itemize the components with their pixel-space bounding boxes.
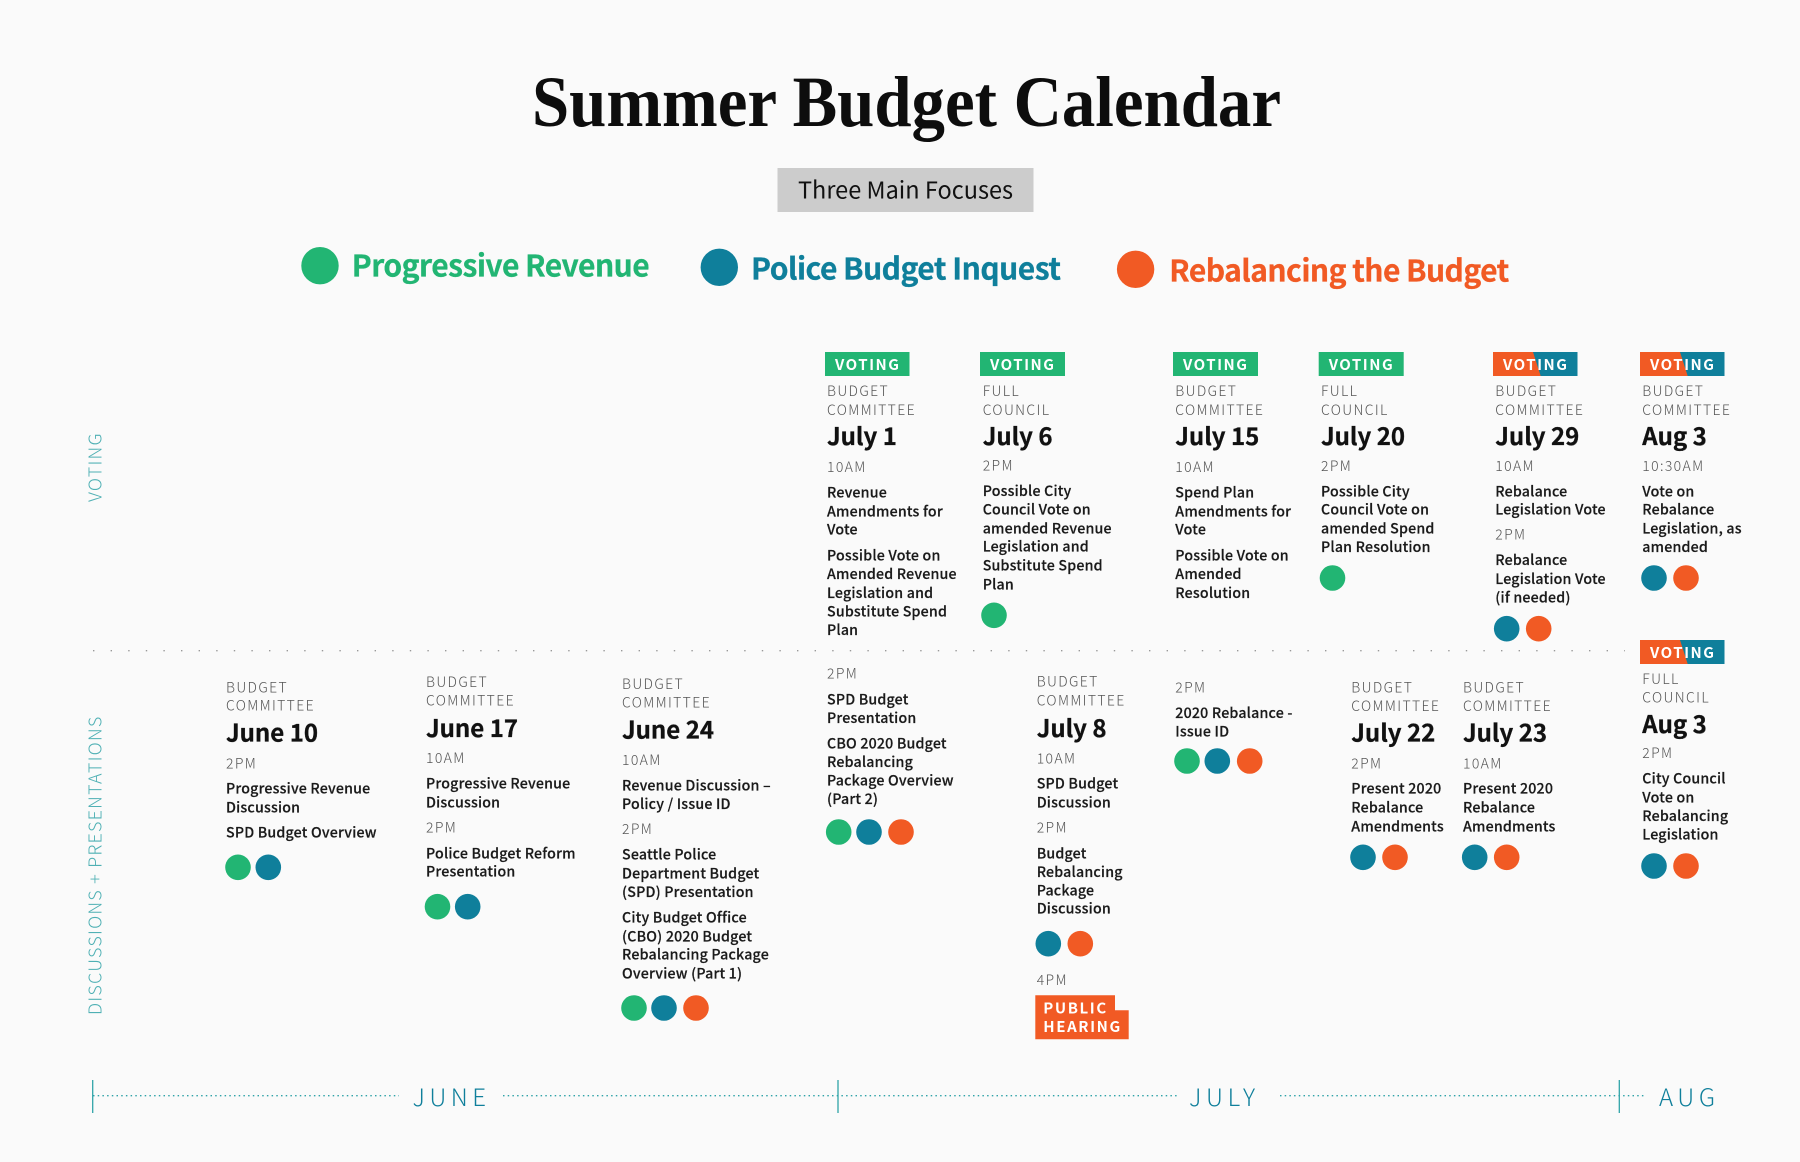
agenda <box>226 779 377 843</box>
date: July 8 <box>1037 709 1107 744</box>
event: July 1 voting <box>825 352 957 640</box>
agenda: Policy / Issue ID <box>622 794 731 814</box>
time: 2PM <box>1351 753 1382 773</box>
agenda: Amendments <box>1351 816 1444 836</box>
committee <box>1642 669 1710 707</box>
agenda <box>1641 769 1728 844</box>
agenda: Revenue Discussion – <box>622 776 771 796</box>
agenda <box>1037 774 1118 812</box>
time: 10AM <box>1495 456 1535 476</box>
time: 10:30AM <box>1642 456 1704 476</box>
agenda: Substitute Spend <box>983 555 1103 575</box>
agenda: Rebalance <box>1351 798 1423 818</box>
badge: voting, two-tone: VOTING <box>1649 354 1716 375</box>
committee <box>1321 381 1389 420</box>
agenda: Substitute Spend <box>827 601 947 621</box>
legend item: progressive revenue: Progressive Revenue <box>352 241 650 285</box>
event: July 1 discussions <box>826 664 954 845</box>
time: 10AM <box>827 457 867 477</box>
agenda: Possible City <box>983 481 1072 501</box>
event: July 6 voting <box>980 352 1112 628</box>
agenda: Plan <box>827 620 858 640</box>
subtitle box: Three Main Focuses <box>798 172 1013 206</box>
time: 2PM <box>622 819 653 839</box>
committee: COUNCIL <box>1642 687 1710 707</box>
time: 2PM <box>1495 524 1526 544</box>
committee: COMMITTEE <box>226 696 315 716</box>
date: July 6 <box>983 417 1053 452</box>
agenda <box>1463 779 1556 836</box>
focus dots <box>1641 565 1699 591</box>
legend <box>301 241 1510 290</box>
agenda: Seattle Police <box>622 845 716 865</box>
event: June 10 <box>225 677 377 880</box>
event: July 22 <box>1350 677 1444 870</box>
agenda: Police Budget Reform <box>426 844 576 864</box>
agenda: Presentation <box>827 708 916 728</box>
focus dots <box>621 995 709 1021</box>
agenda: Vote on <box>1641 481 1694 501</box>
date: July 20 <box>1321 417 1405 452</box>
date: July 29 <box>1495 417 1579 452</box>
agenda: Present 2020 <box>1351 779 1441 799</box>
agenda <box>826 482 957 640</box>
badge: public hearing: PUBLIC <box>1043 998 1108 1019</box>
agenda: Council Vote on <box>1321 499 1429 519</box>
agenda: Rebalancing <box>1642 806 1728 826</box>
time: 2PM <box>1175 677 1206 697</box>
date: June 24 <box>622 710 714 745</box>
legend item: police budget inquest: Police Budget Inquest <box>751 244 1061 288</box>
agenda: Package Overview <box>827 771 954 791</box>
event: June 17 <box>425 672 576 920</box>
committee: BUDGET <box>1495 381 1557 401</box>
time: 2PM <box>1321 456 1352 476</box>
agenda: (SPD) Presentation <box>622 882 754 902</box>
month: June: JUNE <box>412 1078 486 1113</box>
month: Aug: AUG <box>1659 1078 1715 1113</box>
time: 10AM <box>426 748 466 768</box>
agenda: Rebalance <box>1642 499 1714 519</box>
focus dots <box>425 894 481 920</box>
badge: voting: VOTING <box>989 354 1056 375</box>
agenda: Department Budget <box>622 863 760 883</box>
committee: BUDGET <box>426 672 488 692</box>
agenda <box>622 845 769 983</box>
badge: voting: VOTING <box>834 354 901 375</box>
time: 10AM <box>1175 457 1215 477</box>
month timeline <box>93 1078 1715 1113</box>
agenda <box>426 774 570 812</box>
agenda: Overview (Part 1) <box>622 963 742 983</box>
agenda: Legislation and <box>827 583 933 603</box>
committee: COMMITTEE <box>1642 400 1731 420</box>
agenda <box>1351 779 1444 836</box>
date: June 17 <box>426 709 518 744</box>
committee: BUDGET <box>622 674 684 694</box>
agenda: Plan Resolution <box>1321 537 1431 557</box>
agenda <box>827 689 954 809</box>
focus dots <box>981 602 1007 628</box>
focus dots <box>1320 565 1345 591</box>
agenda: amended <box>1642 537 1708 557</box>
agenda: City Council <box>1642 769 1726 789</box>
committee: BUDGET <box>1642 381 1704 401</box>
focus dots <box>1036 931 1093 956</box>
agenda: Plan <box>983 574 1014 594</box>
agenda: Revenue <box>827 482 887 502</box>
focus dots <box>826 819 914 845</box>
event: July 15 discussions <box>1174 677 1293 774</box>
agenda: Legislation and <box>983 537 1089 557</box>
badge: voting <box>1319 352 1404 376</box>
agenda: Possible Vote on <box>1175 545 1289 565</box>
agenda: Rebalance <box>1495 550 1567 570</box>
agenda: amended Spend <box>1321 518 1435 538</box>
agenda: Discussion <box>1037 792 1111 812</box>
agenda: Amendments for <box>827 501 943 521</box>
agenda: Issue ID <box>1175 721 1229 741</box>
agenda: Rebalance <box>1495 481 1567 501</box>
agenda: City Budget Office <box>622 908 747 928</box>
agenda: Budget <box>1037 843 1087 863</box>
agenda <box>1641 481 1742 557</box>
agenda: Resolution <box>1175 583 1250 603</box>
legend item: rebalancing the budget: Rebalancing the Budget <box>1169 246 1510 290</box>
event: July 8 <box>1035 672 1129 1039</box>
focus dots <box>1174 748 1262 774</box>
committee: COMMITTEE <box>827 400 916 420</box>
event: Aug 3 voting <box>1640 352 1742 591</box>
badge: voting, two-tone: VOTING <box>1502 354 1569 375</box>
agenda: Discussion <box>226 797 300 817</box>
badge: voting <box>825 352 910 376</box>
badge: voting, two-tone <box>1493 352 1578 376</box>
time: 2PM <box>983 456 1014 476</box>
committee <box>1642 381 1731 420</box>
time: 10AM <box>1463 753 1503 773</box>
committee: COMMITTEE <box>1037 691 1126 711</box>
committee <box>226 677 315 716</box>
committee: FULL <box>1321 381 1358 401</box>
committee: FULL <box>983 381 1020 401</box>
agenda: Amended Revenue <box>827 564 957 584</box>
agenda <box>426 844 576 882</box>
agenda: Amendments <box>1463 816 1556 836</box>
focus dots <box>1350 844 1408 870</box>
committee: COMMITTEE <box>1495 400 1584 420</box>
focus dots <box>1641 853 1699 879</box>
committee <box>1463 677 1552 716</box>
agenda: Possible City <box>1321 481 1410 501</box>
badge: voting, two-tone <box>1640 352 1724 376</box>
badge: voting <box>980 352 1065 376</box>
committee: BUDGET <box>1351 677 1413 697</box>
badge: public hearing <box>1035 995 1129 1039</box>
agenda: SPD Budget <box>1037 774 1118 794</box>
agenda: 2020 Rebalance - <box>1175 703 1293 723</box>
committee: COMMITTEE <box>1463 696 1552 716</box>
event: July 20 voting <box>1319 352 1435 591</box>
agenda: Rebalance <box>1463 798 1535 818</box>
committee <box>1037 672 1126 711</box>
committee: COMMITTEE <box>1351 696 1440 716</box>
committee: FULL <box>1642 669 1680 689</box>
agenda <box>1037 843 1123 919</box>
committee <box>426 672 515 711</box>
badge: voting, two-tone: VOTING <box>1649 642 1716 663</box>
time: 10AM <box>1037 748 1076 768</box>
agenda: Rebalancing <box>1037 862 1123 882</box>
time: 2PM <box>1037 818 1068 838</box>
committee <box>983 381 1050 420</box>
date: Aug 3 <box>1641 705 1707 740</box>
committee <box>1495 381 1584 420</box>
agenda: SPD Budget Overview <box>226 823 377 843</box>
agenda <box>1495 550 1606 607</box>
agenda: Legislation Vote <box>1495 499 1606 519</box>
badge: voting: VOTING <box>1328 354 1394 375</box>
agenda <box>1175 703 1293 741</box>
row label: voting: VOTING <box>82 432 108 502</box>
date: July 1 <box>827 417 897 452</box>
agenda: Discussion <box>426 792 500 812</box>
agenda: (Part 2) <box>827 789 878 809</box>
focus dots <box>1494 616 1551 642</box>
agenda: amended Revenue <box>983 518 1112 538</box>
committee: COUNCIL <box>983 400 1050 420</box>
agenda: Council Vote on <box>983 499 1091 519</box>
focus dots <box>1462 844 1519 870</box>
committee: BUDGET <box>1463 677 1525 697</box>
agenda <box>622 776 771 814</box>
agenda: Legislation, as <box>1642 518 1742 538</box>
agenda: Legislation Vote <box>1495 569 1606 589</box>
agenda: Progressive Revenue <box>226 779 370 799</box>
committee: COMMITTEE <box>426 691 515 711</box>
event: Aug 3 full council <box>1640 640 1728 879</box>
date: Aug 3 <box>1641 417 1707 452</box>
agenda: Discussion <box>1037 899 1111 919</box>
committee <box>1175 381 1264 420</box>
agenda: Progressive Revenue <box>426 774 570 794</box>
agenda <box>1495 481 1606 519</box>
agenda: Package <box>1037 880 1094 900</box>
agenda: CBO 2020 Budget <box>827 733 947 753</box>
time: 2PM <box>827 664 858 684</box>
agenda: Rebalancing <box>827 752 913 772</box>
date: June 10 <box>226 714 318 749</box>
agenda <box>983 481 1112 594</box>
agenda: Rebalancing Package <box>622 945 769 965</box>
event: June 24 <box>621 674 771 1021</box>
row label: discussions and presentations: DISCUSSIONS + PRESENTATIONS <box>82 715 108 1015</box>
date: July 23 <box>1463 714 1547 748</box>
committee: COMMITTEE <box>622 692 711 712</box>
event: July 29 voting <box>1493 352 1606 642</box>
committee: COUNCIL <box>1321 400 1389 420</box>
agenda: Present 2020 <box>1463 779 1553 799</box>
committee: COMMITTEE <box>1175 400 1264 420</box>
month: July: JULY <box>1189 1078 1255 1113</box>
time: 2PM <box>226 753 257 773</box>
event: July 15 voting <box>1173 352 1291 603</box>
committee <box>622 674 711 712</box>
agenda: Possible Vote on <box>827 545 941 565</box>
committee: BUDGET <box>827 381 889 401</box>
agenda: Legislation <box>1642 824 1719 844</box>
time: 2PM <box>1642 743 1673 763</box>
agenda: Amendments for <box>1175 501 1291 521</box>
date: July 15 <box>1175 417 1259 452</box>
event: July 23 <box>1462 677 1556 870</box>
badge: voting <box>1173 352 1258 376</box>
committee: BUDGET <box>1175 381 1237 401</box>
title: Summer Budget Calendar <box>532 62 1281 142</box>
time: 4PM <box>1037 970 1068 990</box>
agenda <box>1174 482 1291 603</box>
agenda: Spend Plan <box>1175 482 1254 502</box>
agenda: SPD Budget <box>827 689 909 709</box>
agenda: (if needed) <box>1495 587 1571 607</box>
committee <box>1351 677 1440 716</box>
agenda: Vote <box>1174 520 1206 540</box>
committee <box>827 381 916 420</box>
agenda: Amended <box>1175 564 1242 584</box>
time: 2PM <box>426 818 457 838</box>
committee: BUDGET <box>226 677 288 697</box>
badge: public hearing: HEARING <box>1043 1016 1122 1037</box>
badge: voting: VOTING <box>1182 354 1249 375</box>
agenda: Presentation <box>426 862 515 882</box>
time: 10AM <box>622 750 662 770</box>
focus dots <box>225 854 281 880</box>
date: July 22 <box>1351 714 1435 748</box>
agenda: (CBO) 2020 Budget <box>622 926 752 946</box>
agenda: Vote on <box>1641 787 1694 807</box>
badge: voting, two-tone <box>1640 640 1724 664</box>
agenda <box>1321 481 1435 557</box>
committee: BUDGET <box>1037 672 1099 692</box>
subtitle box <box>778 168 1034 212</box>
agenda: Vote <box>826 520 858 540</box>
